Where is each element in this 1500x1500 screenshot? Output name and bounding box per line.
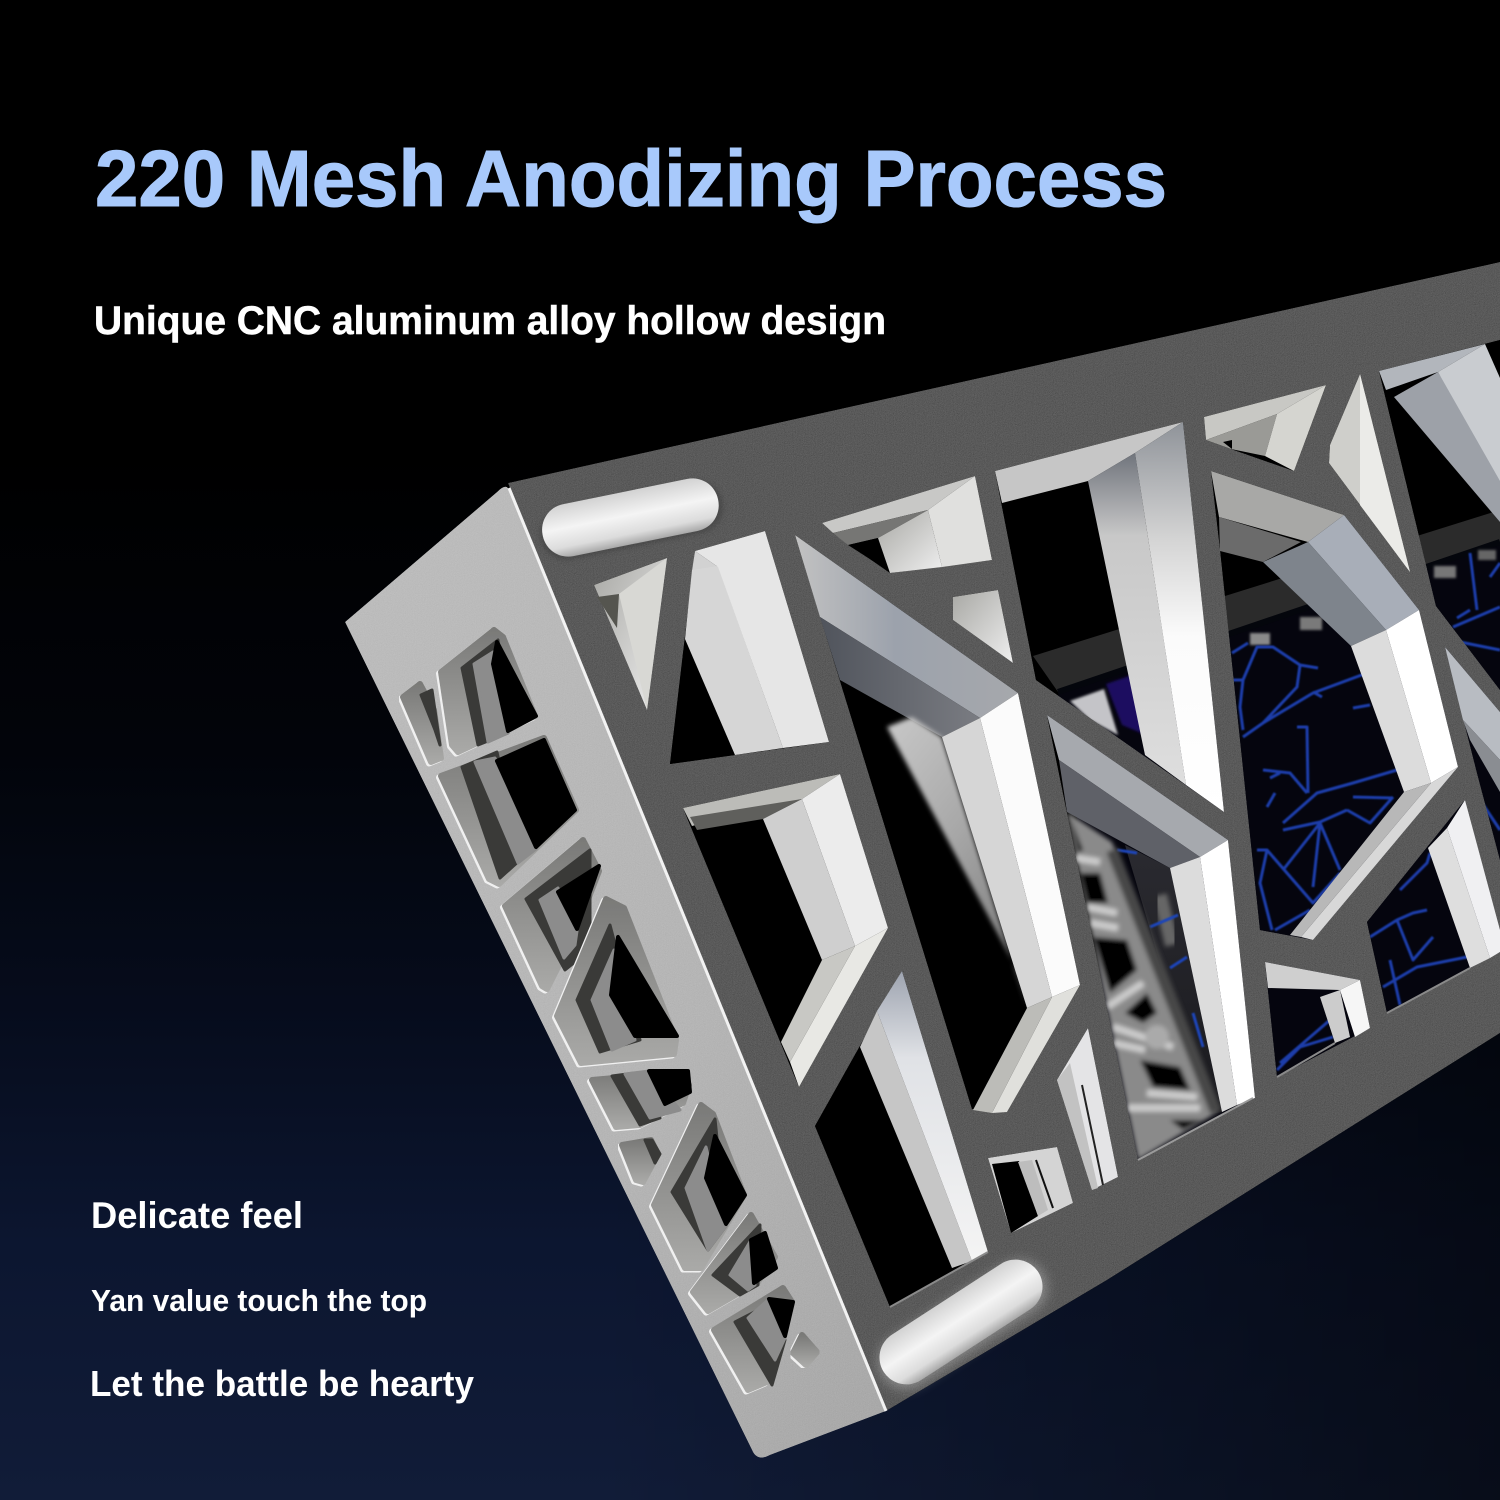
feature line 1: Delicate feel: [91, 1195, 303, 1236]
far frame side seen through opening: [887, 717, 1027, 1008]
hollow bevels: inner walls of the cut-outs: [594, 344, 1500, 1307]
bevel: upper mid opening: [822, 476, 992, 573]
bevel: small top opening: [1204, 385, 1326, 471]
side hole 2: [441, 630, 536, 752]
bottom rubber pad: [868, 1249, 1057, 1399]
bevel: small triangle below: [953, 590, 1013, 663]
bevel: lower right opening: [1387, 800, 1500, 1013]
white edge highlight between side and front: [509, 488, 886, 1411]
bevel: right arc opening: [1211, 471, 1458, 940]
bevel: lower triangular opening: [860, 971, 988, 1307]
truss rungs: [1075, 858, 1200, 1108]
bevel: far right opening: [1445, 647, 1500, 792]
bevel: top-left triangle: [594, 558, 667, 710]
feature text block: [90, 1195, 474, 1404]
side hole 1: [403, 684, 441, 762]
bevel: main diagonal and bright vertical opening: [795, 535, 1080, 1113]
bevel: narrow bottom sliver: [1057, 1028, 1118, 1190]
feature line 3: Let the battle be hearty: [90, 1363, 474, 1404]
side hole 8: [654, 1105, 745, 1268]
bevel: top-right opening: [1379, 344, 1500, 522]
blurred far truss: [1067, 812, 1222, 1160]
bevel: centre opening with truss: [1047, 715, 1255, 1160]
keyboard body: [1058, 542, 1500, 1170]
bevel: tall central opening: [995, 422, 1224, 812]
bevel: A-shaped opening: [685, 531, 829, 755]
bevel: lower-left hexagon opening: [683, 774, 888, 1087]
side hole 9: [693, 1215, 776, 1311]
bevel: small lower opening with keyboard view: [1265, 962, 1370, 1077]
front face with hollow cut-outs: [508, 262, 1500, 1411]
far keycaps: [1070, 550, 1496, 735]
dark keyboard case band: [1033, 510, 1500, 692]
side hole 10: [714, 1288, 793, 1390]
side hole 4: [505, 840, 599, 989]
scene behind the frame: keyboard and far truss: [508, 262, 1500, 1411]
side face of the aluminum frame: [345, 487, 886, 1458]
truss windows: [1070, 817, 1083, 853]
side hole 6: [592, 1071, 690, 1127]
bevel: narrow top triangle: [1329, 374, 1410, 572]
bevel: small bottom opening: [988, 1147, 1073, 1233]
side hole 5: [557, 899, 677, 1063]
side hole 7: [622, 1140, 660, 1182]
side hole 11: small dot: [793, 1335, 817, 1365]
side hole 3: [441, 738, 576, 884]
top rubber pad: [535, 474, 728, 565]
blue glowing keycap lines: [1232, 553, 1500, 1070]
feature line 2: Yan value touch the top: [91, 1283, 427, 1318]
subtitle: Unique CNC aluminum alloy hollow design: [94, 299, 886, 343]
title: 220 Mesh Anodizing Process: [95, 134, 1167, 223]
